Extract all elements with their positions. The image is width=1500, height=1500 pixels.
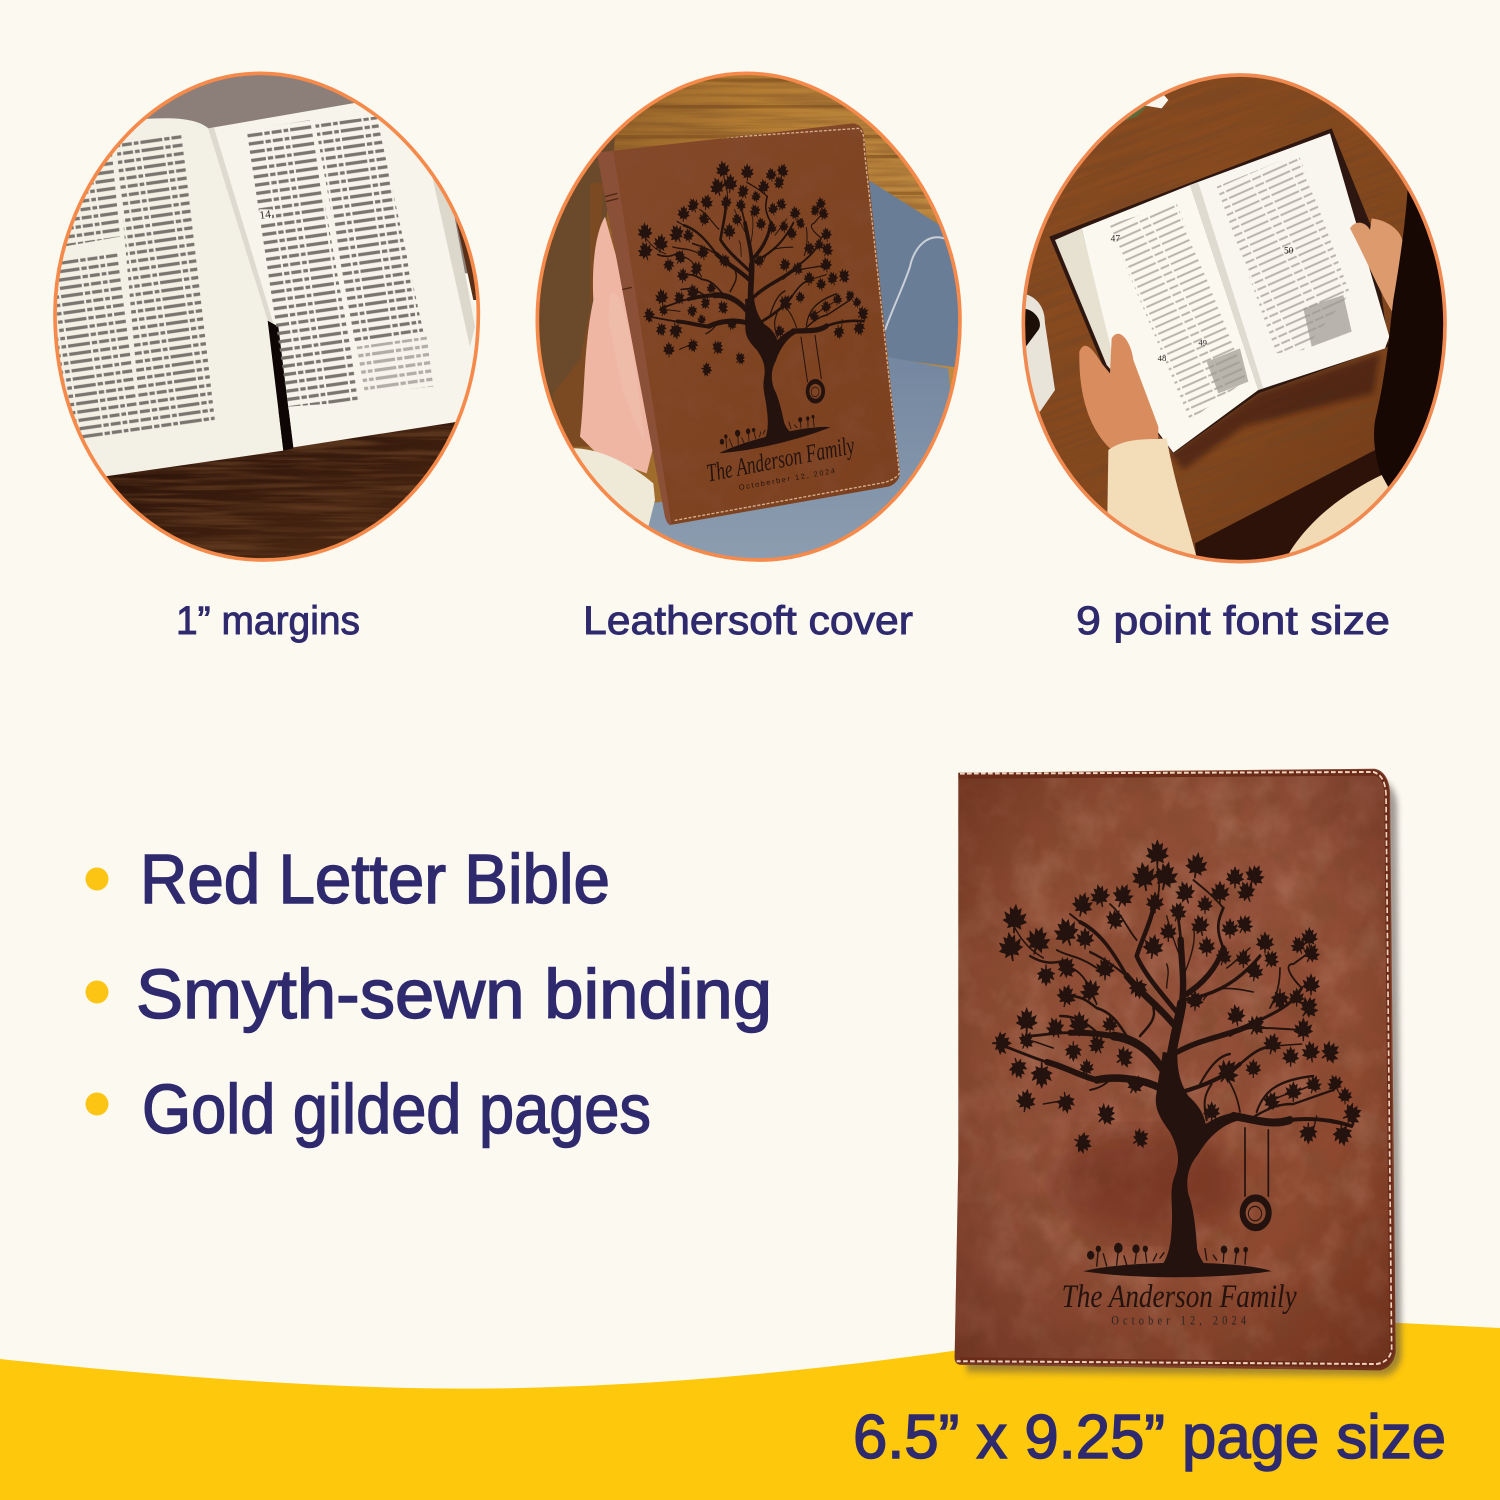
feature: gilded: Gold gilded pages bbox=[142, 1070, 651, 1148]
oval border bbox=[1023, 75, 1445, 562]
engraved family name: The Anderson Family bbox=[704, 431, 857, 488]
bullet: gilded bbox=[86, 1092, 108, 1116]
caption: font size: 9 point font size bbox=[1076, 599, 1390, 643]
hand bbox=[580, 217, 653, 473]
bullet: binding bbox=[86, 980, 108, 1004]
left page bbox=[1082, 185, 1258, 453]
mug bbox=[1023, 293, 1055, 413]
psalm number 49: 49 bbox=[1198, 338, 1207, 348]
right page bbox=[208, 101, 480, 447]
chapter number: 14 bbox=[259, 208, 272, 222]
book cover bbox=[1049, 128, 1388, 453]
bullet: red letter bbox=[86, 868, 108, 890]
book bbox=[597, 123, 900, 525]
psalm number 48: 48 bbox=[1158, 353, 1166, 363]
feature: red letter: Red Letter Bible bbox=[140, 840, 610, 918]
caption: cover: Leathersoft cover bbox=[583, 599, 913, 643]
left furniture bbox=[539, 136, 616, 403]
sweater cuff bbox=[574, 448, 655, 526]
book shadow bbox=[1170, 353, 1380, 470]
left hand bbox=[1079, 334, 1158, 450]
feature list bbox=[86, 840, 772, 1148]
feature: binding: Smyth-sewn binding bbox=[136, 955, 772, 1033]
verse text bbox=[1108, 203, 1247, 420]
oval border bbox=[537, 73, 960, 560]
engraved tree bbox=[624, 132, 886, 470]
engraved date: October 12, 2024 bbox=[1111, 1315, 1246, 1328]
bookmark gap bbox=[268, 321, 293, 451]
engraved tree bbox=[992, 839, 1365, 1277]
psalm number 47: 47 bbox=[1111, 235, 1120, 245]
left sweater sleeve bbox=[1107, 438, 1198, 563]
engraved family name: The Anderson Family bbox=[1062, 1278, 1297, 1315]
left page bbox=[40, 118, 283, 477]
photo: Bible read on wooden table bbox=[1022, 73, 1447, 564]
right hand bbox=[1350, 218, 1403, 313]
psalm number 50: 50 bbox=[1284, 246, 1294, 256]
flower bbox=[1124, 106, 1148, 121]
oval border bbox=[55, 73, 478, 560]
photo: open Bible showing 1 inch margins bbox=[53, 72, 480, 562]
yellow wave band bbox=[0, 1323, 1500, 1500]
right page bbox=[1190, 133, 1389, 390]
page block bbox=[1055, 228, 1111, 370]
right sweater bbox=[1289, 475, 1388, 553]
hair bbox=[1374, 190, 1444, 487]
engraved date: Octoberber 12, 2024 bbox=[738, 466, 836, 492]
large leather Bible cover bbox=[953, 768, 1402, 1376]
text columns bbox=[53, 250, 140, 442]
photo: leathersoft cover held in hand bbox=[536, 72, 962, 562]
caption: margins: 1” margins bbox=[176, 599, 360, 643]
page size label: 6.5” x 9.25” page size bbox=[853, 1403, 1446, 1472]
table edge strip bbox=[1195, 447, 1388, 563]
jeans bbox=[868, 180, 963, 368]
